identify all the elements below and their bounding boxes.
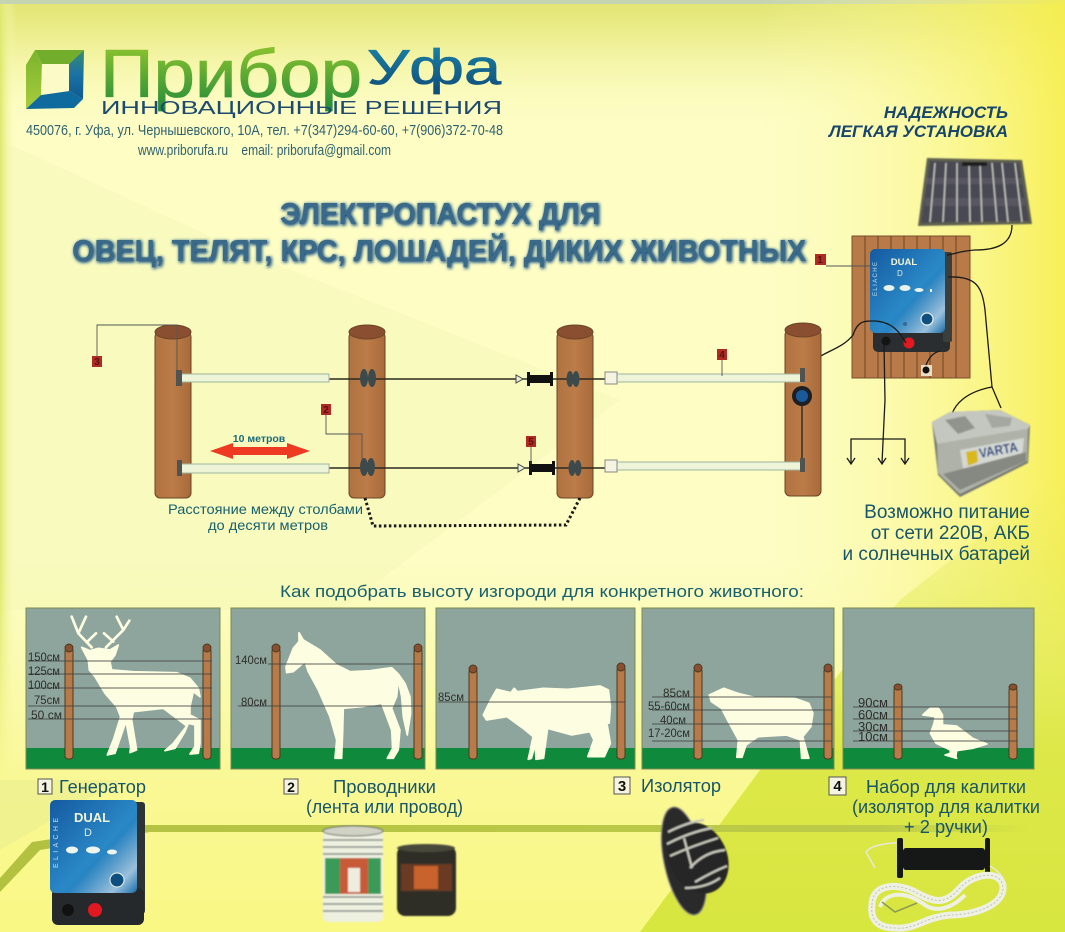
goose silhouette	[923, 708, 987, 758]
solar panel	[918, 158, 1032, 226]
item 2 label: Проводники	[333, 777, 436, 797]
wires	[28, 661, 212, 719]
post 2	[349, 325, 385, 498]
posts	[469, 663, 625, 759]
callout numbers: 3	[94, 357, 100, 368]
cow silhouette	[483, 686, 610, 759]
callout numbers: 5	[528, 437, 534, 448]
tagline: ИННОВАЦИОННЫЕ РЕШЕНИЯ	[101, 98, 502, 118]
height labels: 30см	[858, 719, 888, 734]
posts	[694, 664, 832, 759]
height labels: 75см	[34, 693, 60, 707]
board	[852, 236, 970, 378]
fence diagram	[92, 254, 872, 533]
title: ЭЛЕКТРОПАСТУХ ДЛЯ	[280, 196, 600, 231]
panel: horse	[231, 608, 425, 769]
callout numbers: 2	[323, 405, 329, 416]
height labels: 80см	[241, 695, 267, 709]
logo wordmark: Прибор	[100, 36, 362, 112]
height labels: 10см	[858, 729, 888, 744]
panel: sheep	[642, 608, 834, 769]
reliability note: ЛЕГКАЯ УСТАНОВКА	[827, 122, 1008, 141]
corner insulator	[792, 386, 812, 406]
wires	[652, 697, 832, 741]
height labels: 50 см	[31, 708, 62, 722]
title: ОВЕЦ, ТЕЛЯТ, КРС, ЛОШАДЕЙ, ДИКИХ ЖИВОТНЫХ	[72, 232, 806, 268]
title: ОВЕЦ, ТЕЛЯТ, КРС, ЛОШАДЕЙ, ДИКИХ ЖИВОТНЫХ	[73, 233, 807, 269]
power note: Возможно питание	[864, 502, 1030, 523]
distance arrow	[210, 433, 310, 459]
panel: goose	[843, 608, 1034, 769]
height labels: 60см	[858, 707, 888, 722]
power note: от сети 220В, АКБ	[871, 523, 1030, 544]
battery	[932, 410, 1030, 497]
product: black tape roll	[397, 844, 456, 916]
panel: deer	[26, 608, 220, 769]
item 2 label: (лента или провод)	[306, 797, 463, 817]
height label: 85см	[438, 690, 464, 704]
distance arrow: 10 метров	[233, 433, 286, 445]
height labels: 85см	[663, 686, 690, 700]
power note	[842, 502, 1030, 565]
callout numbers: 1	[817, 255, 823, 266]
height labels	[858, 695, 888, 744]
wires	[853, 707, 1017, 741]
wire	[438, 701, 625, 703]
title	[72, 196, 807, 269]
height labels: 40см	[660, 713, 686, 727]
olive horizontal bar	[0, 825, 1030, 892]
horse silhouette	[286, 633, 411, 758]
height labels	[235, 653, 267, 709]
callout numbers	[92, 254, 826, 448]
item 1 label: Генератор	[59, 777, 146, 797]
height labels: 90см	[858, 695, 888, 710]
item 2 label: 2	[287, 779, 295, 795]
fence height heading: Как подобрать высоту изгороди для конкретного животного:	[280, 582, 804, 601]
posts	[272, 644, 422, 759]
product: gate handle and rope	[866, 838, 1005, 928]
generator device: DUAL	[891, 257, 917, 268]
product: white tape roll	[323, 826, 383, 922]
post 3	[557, 325, 593, 498]
title: ЭЛЕКТРОПАСТУХ ДЛЯ	[281, 197, 601, 232]
panel: cow	[436, 608, 635, 769]
item 4 label: 4	[833, 778, 842, 795]
item 4 label: + 2 ручки)	[904, 817, 988, 837]
height labels: 125см	[28, 664, 60, 678]
item 2 label	[284, 777, 463, 817]
height labels: 140см	[235, 653, 267, 667]
battery brand: VARTA	[978, 439, 1019, 461]
reliability note: НАДЕЖНОСТЬ	[884, 103, 1008, 122]
item 1 label: 1	[41, 779, 49, 795]
item 3 label: 3	[618, 778, 626, 795]
deer silhouette	[72, 617, 200, 755]
power note: и солнечных батарей	[842, 544, 1030, 565]
product: generator: D	[84, 827, 92, 839]
item 4 label: (изолятор для калитки	[852, 797, 1040, 817]
height labels	[28, 650, 62, 722]
product: generator	[50, 800, 145, 925]
item 4 label	[829, 777, 1040, 837]
handle	[897, 838, 990, 878]
rope	[872, 875, 1003, 928]
web and email: www.priborufa.ru email: priborufa@gmail.com	[137, 142, 391, 159]
post 4	[785, 323, 821, 496]
tape connectors	[605, 372, 617, 472]
logo	[26, 36, 503, 159]
insulators	[360, 369, 582, 476]
reliability note	[827, 103, 1008, 141]
generator device: ELIACHE	[873, 262, 879, 296]
height labels	[648, 686, 690, 740]
ground terminal	[921, 365, 932, 376]
wires	[238, 664, 423, 706]
height labels: 17-20см	[648, 726, 690, 740]
brackets	[176, 368, 805, 476]
dotted span marker	[365, 498, 580, 526]
logo cube icon	[26, 50, 84, 109]
product: generator: ELIACHE	[53, 818, 60, 868]
posts	[894, 684, 1017, 759]
callout leaders	[97, 266, 872, 464]
sheep silhouette	[709, 688, 813, 758]
distance note	[168, 502, 363, 533]
item 4 label: Набор для калитки	[866, 777, 1026, 797]
product: generator: DUAL	[74, 810, 110, 825]
post 1	[155, 325, 191, 498]
generator device: D	[897, 269, 903, 278]
post wiring and ground rods	[803, 225, 1012, 464]
wires	[329, 379, 802, 468]
height labels: 150см	[28, 650, 60, 664]
tapes	[181, 374, 801, 473]
item 3 label: Изолятор	[641, 776, 721, 796]
posts	[65, 644, 211, 759]
product: insulator	[653, 803, 740, 919]
gate handles	[516, 372, 555, 475]
distance note: до десяти метров	[208, 518, 328, 533]
generator device	[870, 249, 952, 352]
distance note: Расстояние между столбами	[168, 502, 363, 517]
logo wordmark city: Уфа	[367, 41, 502, 95]
height labels: 55-60см	[648, 699, 690, 713]
wooden board with generator	[852, 236, 970, 378]
callout numbers: 4	[719, 350, 725, 361]
address: 450076, г. Уфа, ул. Чернышевского, 10А, тел. +7(347)294-60-60, +7(906)372-70-48	[26, 122, 503, 139]
height labels: 100см	[28, 678, 60, 692]
